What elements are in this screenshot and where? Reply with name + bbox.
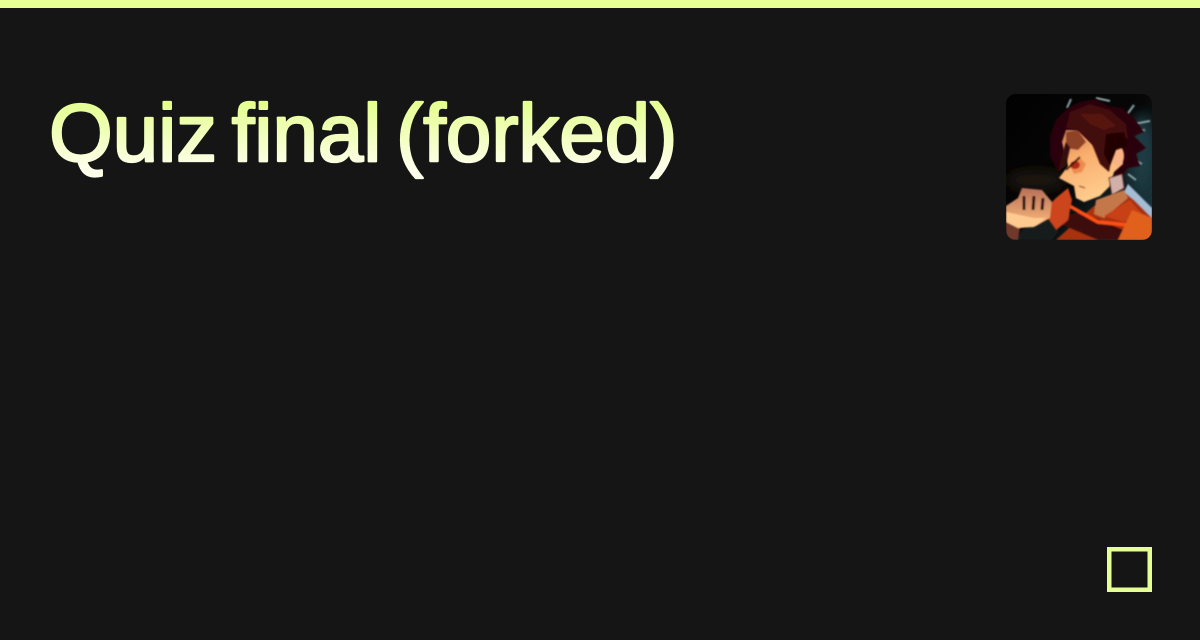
face [1059,130,1124,202]
hair fringe [1058,104,1128,172]
earring [1109,174,1124,195]
eye [1070,161,1080,169]
ear [1113,148,1125,165]
top accent bar [0,0,1200,8]
title: Quiz final (forked) [49,88,677,179]
hair highlights [1067,98,1150,180]
outfit [1016,184,1152,240]
icon: anime character avatar [1006,94,1152,240]
icon: outlined square [1107,547,1152,592]
fist [1006,188,1052,240]
background [1006,94,1152,240]
hair back [1050,99,1146,180]
